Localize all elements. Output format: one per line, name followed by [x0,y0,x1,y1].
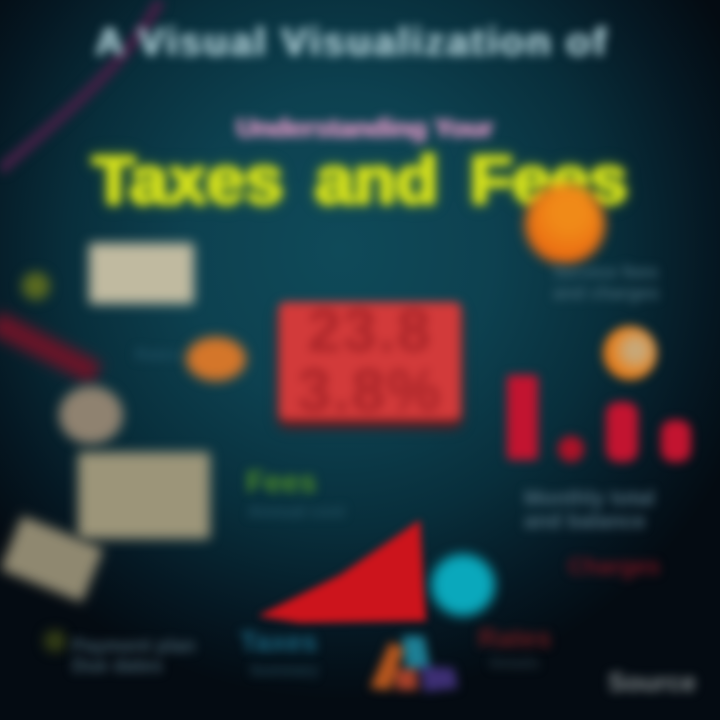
text block: bottom left [68,634,198,677]
text block: upper right: Service fees [553,262,658,282]
text block: bottom left: Payment plan [72,636,196,657]
blue label: Taxes [240,626,317,657]
chart: red bars [499,367,699,470]
panel: tilted beige card [0,516,104,602]
icon: beige circle [59,386,123,444]
green label caption: Annual cost [248,502,344,521]
panel: beige card [78,452,210,539]
icon: cyan circle [431,554,495,616]
main title: Taxes and Fees [93,141,627,218]
icon: orange badge [186,337,246,381]
blue label caption: Summary [250,662,318,679]
text block: upper right [552,261,660,305]
icon: orange and cream circle [603,326,657,380]
panel: beige note [89,243,194,304]
red label caption: Details [490,655,539,672]
text block: upper right: and charges [553,283,659,303]
green label: Fees [246,464,317,499]
chart: red figure block [279,302,461,420]
text block: middle right: and balance [524,510,645,533]
red bottom label: Rates [478,623,552,653]
subtitle: Understanding Your [236,113,494,143]
red label: Charges [568,553,660,579]
icon: orange circle [525,184,605,264]
footer label: Source [608,667,696,697]
icon: multicolour logo [365,629,463,698]
top heading: A Visual Visualization of [96,21,608,64]
icon: olive bullet [44,630,66,652]
icon: olive dot [22,272,50,300]
text block: middle right: Monthly total [524,487,655,510]
text label left of orange badge: Rates [135,345,181,364]
text block: middle right [521,487,658,533]
decorative red diagonal [0,311,102,385]
text block: bottom left: Due dates [72,656,163,677]
